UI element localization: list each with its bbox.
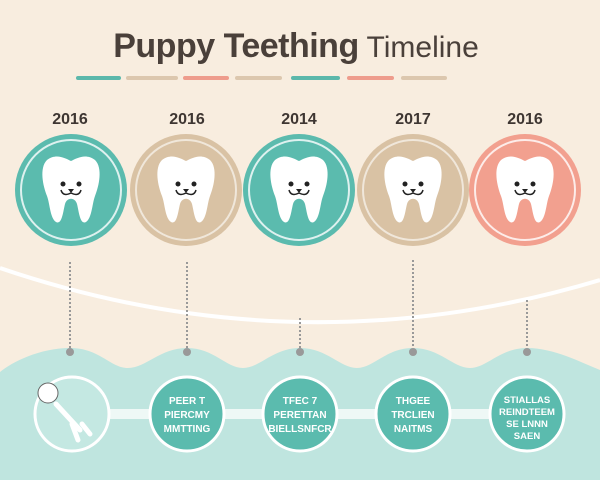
- bottom circle 5: REINDTEEM: [499, 407, 555, 418]
- years: 2016: [169, 111, 205, 128]
- circle 5: [469, 134, 581, 246]
- bottom circle 5: STIALLAS: [504, 395, 550, 406]
- years: 2016: [52, 111, 88, 128]
- years: 2016: [507, 111, 543, 128]
- bottom circle 2: [150, 377, 224, 451]
- bottom circle 2: MMTTING: [164, 424, 211, 435]
- years: 2014: [281, 111, 317, 128]
- dotted leaders: [70, 260, 527, 350]
- white curve: [0, 268, 600, 322]
- bottom circle 4: [376, 377, 450, 451]
- bottom circle 1: icon: [35, 377, 109, 451]
- title underline dashes: [78, 76, 445, 80]
- circle 1: [15, 134, 127, 246]
- bottom circle 5: SAEN: [514, 431, 540, 442]
- title: Puppy Teething Timeline: [113, 27, 479, 65]
- bottom circle 4: THGEE: [396, 396, 431, 407]
- circle 3: [243, 134, 355, 246]
- bottom circle 3: [263, 377, 337, 451]
- bottom circle 3: BIELLSNFCR: [268, 424, 332, 435]
- bottom circle 5: [490, 377, 564, 451]
- bottom circle 3: PERETTAN: [273, 410, 327, 421]
- years: [52, 111, 543, 128]
- circle 4: [357, 134, 469, 246]
- connectors: [103, 186, 424, 190]
- bottom circle 2: PEER T: [169, 396, 205, 407]
- bottom connector bar: [90, 409, 510, 419]
- wave band: [0, 348, 600, 480]
- bottom circle 2: PIERCMY: [164, 410, 210, 421]
- circle 2: [130, 134, 242, 246]
- bottom circle 4: TRCLIEN: [391, 410, 435, 421]
- bottom circle 3: TFEC 7: [283, 396, 318, 407]
- bottom circle 5: SE LNNN: [506, 419, 548, 430]
- years: 2017: [395, 111, 431, 128]
- bottom circle 4: NAITMS: [394, 424, 432, 435]
